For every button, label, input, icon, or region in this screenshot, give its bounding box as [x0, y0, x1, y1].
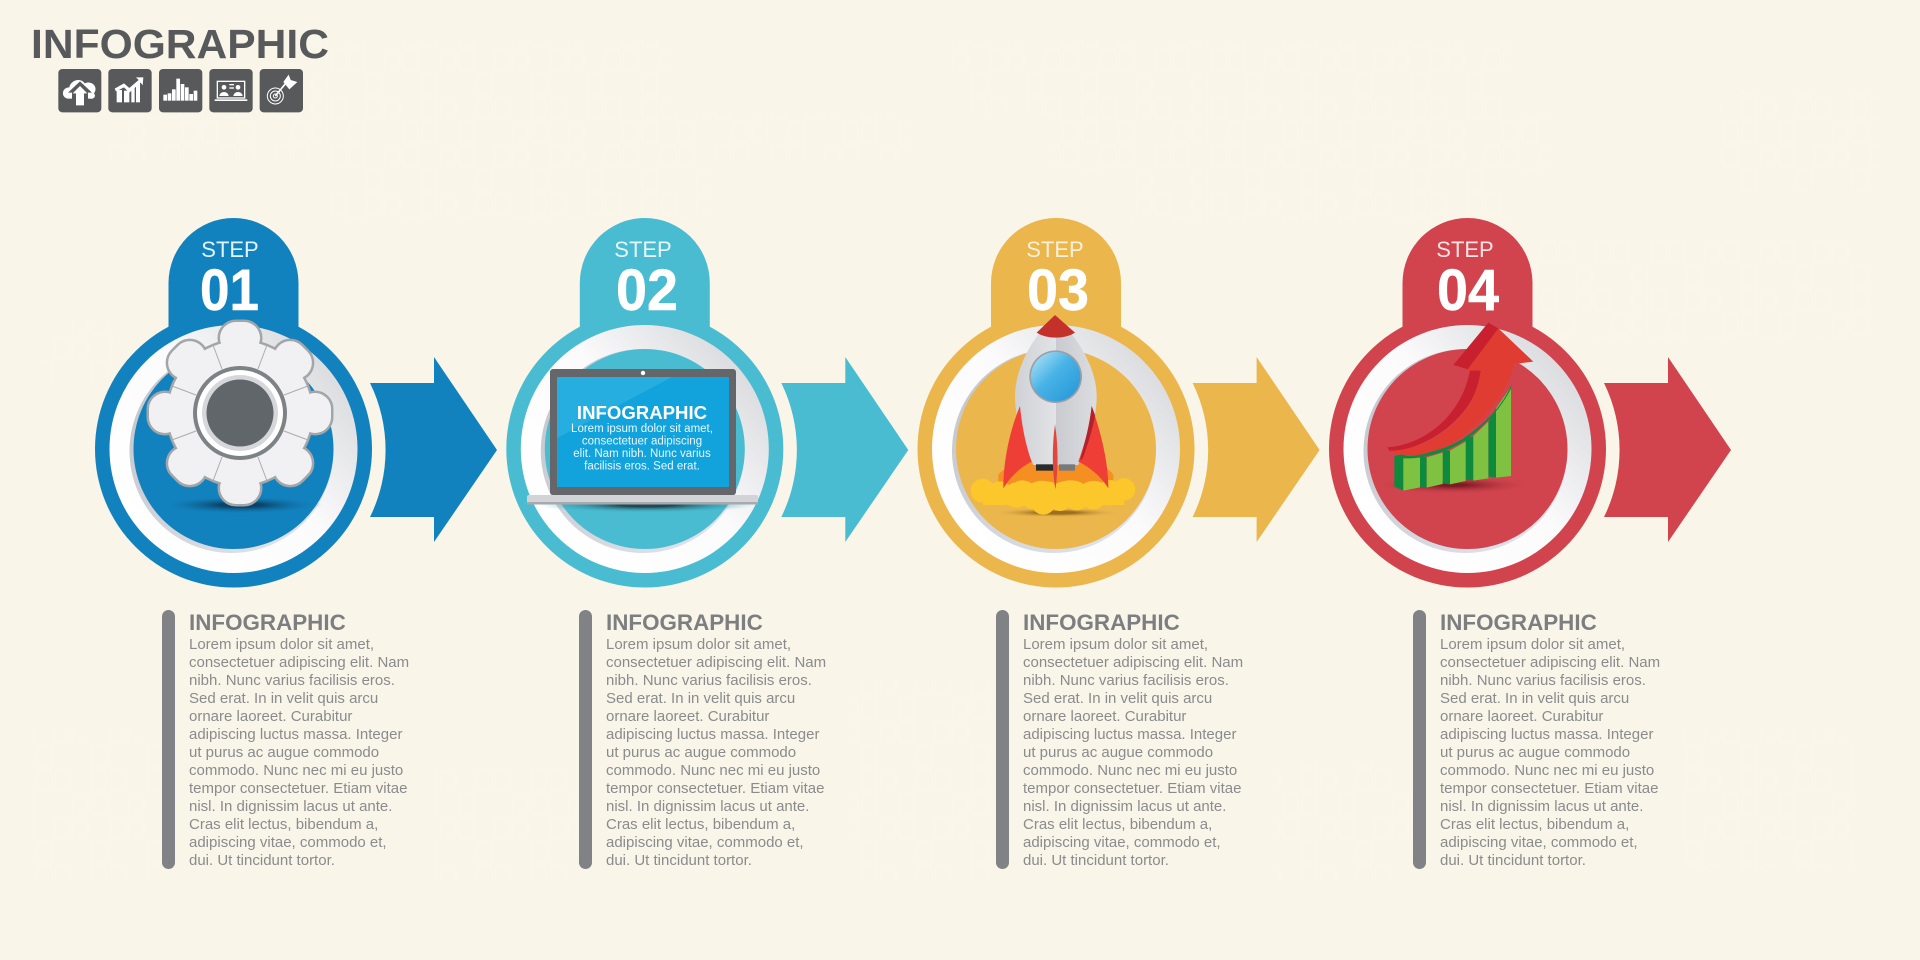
- panel: step 3 text: dui. Ut tincidunt tortor.: [1023, 852, 1169, 869]
- panel: step 1 text: Cras elit lectus, bibendum a,: [189, 816, 378, 833]
- panel: step 3 text: Lorem ipsum dolor sit amet,: [1023, 636, 1208, 653]
- panel: step 4 text: nisl. In dignissim lacus ut ante.: [1440, 798, 1643, 815]
- title: INFOGRAPHIC: [31, 21, 329, 67]
- step 4 badge: [1329, 218, 1606, 588]
- panel: step 1 text: ut purus ac augue commodo: [189, 744, 379, 761]
- panel: step 2 text: adipiscing luctus massa. Integer: [606, 726, 819, 743]
- panel: step 1 text: [162, 610, 409, 869]
- panel: step 4 text: adipiscing vitae, commodo et,: [1440, 834, 1638, 851]
- panel: step 2 text: INFOGRAPHIC: [606, 610, 763, 635]
- icon: cloud upload: [58, 69, 101, 112]
- icon: target with arrow: [260, 69, 303, 112]
- panel: step 2 text: nibh. Nunc varius facilisis eros.: [606, 672, 812, 689]
- panel: step 2 text: Lorem ipsum dolor sit amet,: [606, 636, 791, 653]
- panel: step 1 text: nisl. In dignissim lacus ut ante.: [189, 798, 392, 815]
- step 2 icon: laptop: [527, 369, 758, 513]
- laptop screen text: INFOGRAPHIC: [577, 402, 707, 423]
- step 3 badge: [918, 218, 1194, 588]
- panel: step 3 text: consectetuer adipiscing elit. Nam: [1023, 654, 1243, 671]
- panel: step 4 text: INFOGRAPHIC: [1440, 610, 1597, 635]
- panel: step 1 text: nibh. Nunc varius facilisis eros.: [189, 672, 395, 689]
- panel: step 2 text: dui. Ut tincidunt tortor.: [606, 852, 752, 869]
- step 1 label: 01: [200, 258, 259, 323]
- panel: step 4 text: Lorem ipsum dolor sit amet,: [1440, 636, 1625, 653]
- panel: step 3 text: Cras elit lectus, bibendum a,: [1023, 816, 1212, 833]
- laptop screen text: Lorem ipsum dolor sit amet,: [571, 423, 713, 435]
- laptop screen text: facilisis eros. Sed erat.: [584, 460, 700, 472]
- icon: rising chart: [108, 69, 152, 112]
- laptop screen text: consectetuer adipiscing: [582, 436, 702, 448]
- panel: step 4 text: ut purus ac augue commodo: [1440, 744, 1630, 761]
- step 2 label: 02: [616, 258, 678, 323]
- panel: step 2 text: Cras elit lectus, bibendum a,: [606, 816, 795, 833]
- panel: step 1 text: consectetuer adipiscing elit. Nam: [189, 654, 409, 671]
- panel: step 1 text: commodo. Nunc nec mi eu justo: [189, 762, 403, 779]
- panel: step 1 text: adipiscing vitae, commodo et,: [189, 834, 387, 851]
- panel: step 4 text: dui. Ut tincidunt tortor.: [1440, 852, 1586, 869]
- panel: step 3 text: ut purus ac augue commodo: [1023, 744, 1213, 761]
- panel: step 1 text: Lorem ipsum dolor sit amet,: [189, 636, 374, 653]
- panel: step 2 text: Sed erat. In in velit quis arcu: [606, 690, 795, 707]
- step 1 arrow: [370, 357, 497, 542]
- panel: step 3 text: INFOGRAPHIC: [1023, 610, 1180, 635]
- icon: bar chart: [159, 69, 202, 112]
- step 1 icon: gear: [149, 322, 331, 514]
- panel: step 4 text: commodo. Nunc nec mi eu justo: [1440, 762, 1654, 779]
- panel: step 4 text: Cras elit lectus, bibendum a,: [1440, 816, 1629, 833]
- panel: step 2 text: adipiscing vitae, commodo et,: [606, 834, 804, 851]
- panel: step 4 text: tempor consectetuer. Etiam vitae: [1440, 780, 1658, 797]
- panel: step 1 text: Sed erat. In in velit quis arcu: [189, 690, 378, 707]
- panel: step 1 text: tempor consectetuer. Etiam vitae: [189, 780, 407, 797]
- panel: step 2 text: [579, 610, 826, 869]
- panel: step 1 text: INFOGRAPHIC: [189, 610, 346, 635]
- panel: step 3 text: adipiscing luctus massa. Integer: [1023, 726, 1236, 743]
- step 3 icon: rocket: [971, 315, 1135, 517]
- panel: step 4 text: consectetuer adipiscing elit. Nam: [1440, 654, 1660, 671]
- panel: step 4 text: Sed erat. In in velit quis arcu: [1440, 690, 1629, 707]
- panel: step 1 text: ornare laoreet. Curabitur: [189, 708, 352, 725]
- step 3 arrow: [1193, 357, 1320, 542]
- panel: step 2 text: consectetuer adipiscing elit. Nam: [606, 654, 826, 671]
- panel: step 3 text: tempor consectetuer. Etiam vitae: [1023, 780, 1241, 797]
- panel: step 3 text: nisl. In dignissim lacus ut ante.: [1023, 798, 1226, 815]
- step 4 label: STEP: [1436, 237, 1494, 262]
- panel: step 3 text: [996, 610, 1243, 869]
- panel: step 4 text: nibh. Nunc varius facilisis eros.: [1440, 672, 1646, 689]
- icon row: [58, 69, 303, 112]
- panel: step 4 text: [1413, 610, 1660, 869]
- panel: step 4 text: ornare laoreet. Curabitur: [1440, 708, 1603, 725]
- panel: step 3 text: ornare laoreet. Curabitur: [1023, 708, 1186, 725]
- panel: step 2 text: ornare laoreet. Curabitur: [606, 708, 769, 725]
- panel: step 2 text: nisl. In dignissim lacus ut ante.: [606, 798, 809, 815]
- panel: step 1 text: adipiscing luctus massa. Integer: [189, 726, 402, 743]
- panel: step 1 text: dui. Ut tincidunt tortor.: [189, 852, 335, 869]
- step 4 icon: growth chart with arrow: [1373, 323, 1533, 494]
- step 2 arrow: [781, 357, 908, 542]
- laptop screen text: [571, 402, 713, 472]
- panel: step 3 text: Sed erat. In in velit quis arcu: [1023, 690, 1212, 707]
- step 4 arrow: [1604, 357, 1731, 542]
- step 4 label: 04: [1437, 258, 1499, 323]
- panel: step 2 text: ut purus ac augue commodo: [606, 744, 796, 761]
- icon: laptop with people: [209, 69, 253, 112]
- step 3 label: 03: [1027, 258, 1089, 323]
- panel: step 3 text: nibh. Nunc varius facilisis eros.: [1023, 672, 1229, 689]
- panel: step 3 text: commodo. Nunc nec mi eu justo: [1023, 762, 1237, 779]
- panel: step 3 text: adipiscing vitae, commodo et,: [1023, 834, 1221, 851]
- step 3 label: STEP: [1026, 237, 1084, 262]
- step 1 label: STEP: [201, 237, 259, 262]
- panel: step 4 text: adipiscing luctus massa. Integer: [1440, 726, 1653, 743]
- laptop screen text: elit. Nam nibh. Nunc varius: [573, 448, 711, 460]
- step 1 badge: [95, 218, 372, 588]
- step 2 badge: [506, 218, 783, 588]
- panel: step 2 text: commodo. Nunc nec mi eu justo: [606, 762, 820, 779]
- panel: step 2 text: tempor consectetuer. Etiam vitae: [606, 780, 824, 797]
- step 2 label: STEP: [614, 237, 672, 262]
